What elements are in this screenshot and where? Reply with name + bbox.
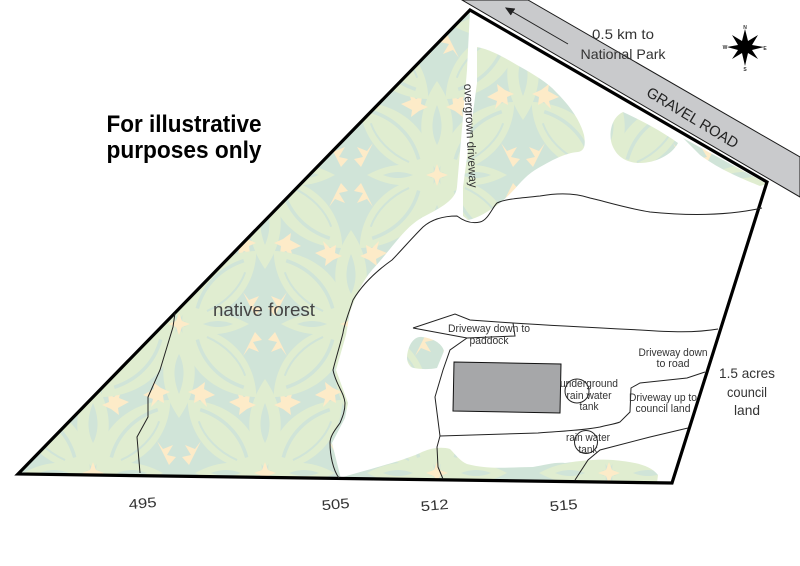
driveway and tank labels: to road xyxy=(656,358,690,370)
label: council land xyxy=(719,365,775,418)
driveway and tank labels: Driveway down xyxy=(638,347,708,359)
driveway and tank labels: tank xyxy=(580,401,599,413)
lot numbers xyxy=(128,494,578,514)
label: native forest: native forest xyxy=(213,300,315,320)
driveway and tank labels: paddock xyxy=(470,335,509,347)
driveway and tank labels: tank xyxy=(578,444,598,456)
driveway and tank labels xyxy=(448,323,708,456)
label: council land: 1.5 acres xyxy=(719,365,775,381)
label: distance to national park: 0.5 km to xyxy=(592,26,654,42)
lot numbers: 515 xyxy=(549,496,578,514)
driveway and tank labels: Driveway down to xyxy=(448,323,530,335)
driveway and tank labels: rain water xyxy=(566,390,612,402)
property boundary xyxy=(18,10,767,483)
compass rose: N xyxy=(743,25,747,31)
driveway and tank labels: Driveway up to xyxy=(629,392,697,404)
native forest area xyxy=(18,10,767,483)
compass rose: S xyxy=(743,67,747,73)
lot numbers: 505 xyxy=(321,495,350,513)
driveway and tank labels: underground xyxy=(560,378,618,390)
driveway and tank labels: council land xyxy=(636,403,690,415)
gravel road xyxy=(462,0,800,197)
label: gravel road: GRAVEL ROAD xyxy=(643,84,741,152)
title note: For illustrative xyxy=(106,111,262,138)
lot numbers: 495 xyxy=(128,494,157,512)
label: distance to national park xyxy=(580,26,667,62)
label: overgrown driveway: overgrown driveway xyxy=(461,83,480,188)
title note: purposes only xyxy=(106,137,262,164)
boundary lines and driveways xyxy=(137,194,762,480)
arrow to national park xyxy=(506,8,568,44)
compass rose: E xyxy=(763,46,767,52)
building xyxy=(453,362,561,413)
label: distance to national park: National Park xyxy=(580,46,667,62)
driveway and tank labels: rain water xyxy=(566,432,610,444)
title note xyxy=(106,111,262,164)
label: council land: council xyxy=(727,384,767,400)
compass rose: W xyxy=(723,45,728,51)
compass rose xyxy=(723,25,767,73)
lot numbers: 512 xyxy=(420,496,449,514)
label: council land: land xyxy=(734,402,760,418)
